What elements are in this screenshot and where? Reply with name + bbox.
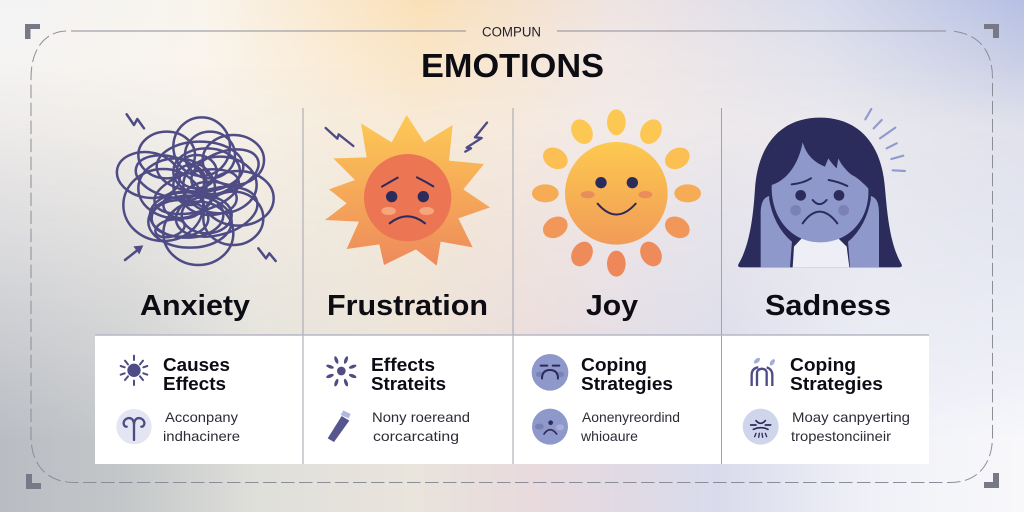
icon: frown badge one <box>532 354 568 391</box>
body text: Moay canpyerting <box>792 409 910 425</box>
body text: Nony roereand <box>372 409 470 425</box>
small overline label: COMPUN <box>482 24 541 40</box>
heading: Sadness: Sadness <box>765 290 891 322</box>
subheading: Strateits <box>371 374 446 394</box>
subheading: Effects <box>371 355 435 375</box>
body text: tropestonciineir <box>791 428 891 444</box>
heading: Joy: Joy <box>586 290 638 322</box>
icon: aries glyph <box>116 409 152 444</box>
icon: frown badge two <box>532 409 568 445</box>
subheading: Coping <box>581 355 647 375</box>
heading: Frustration: Frustration <box>327 290 488 322</box>
icon: joy sun <box>532 109 701 277</box>
icon: pencil <box>328 410 351 442</box>
body text: indhacinere <box>163 428 240 444</box>
icon: sad badge <box>743 409 779 445</box>
panel: details table <box>95 335 929 464</box>
column dividers <box>95 108 929 464</box>
body text: corcarcating <box>373 428 459 444</box>
subheading: Causes <box>163 355 230 375</box>
cell: sadness details <box>743 355 910 445</box>
subheading: Strategies <box>790 374 883 394</box>
icon: small burst <box>326 356 357 387</box>
cell: anxiety details <box>116 355 240 444</box>
subheading: Coping <box>790 355 856 375</box>
body text: Acconpany <box>165 409 238 425</box>
title: EMOTIONS <box>421 48 604 85</box>
subheading: Effects <box>163 374 226 394</box>
cell: frustration details <box>326 355 470 444</box>
icon: arches with drops <box>752 357 776 386</box>
icon: anxiety tangle <box>113 114 276 265</box>
heading: Anxiety: Anxiety <box>140 290 250 322</box>
icon: small sun <box>121 356 147 385</box>
subheading: Strategies <box>581 374 673 394</box>
icon: sad girl <box>738 109 905 267</box>
icon: frustration sun <box>325 115 490 266</box>
cell: joy details <box>532 354 680 445</box>
body text: whioaure <box>580 428 638 444</box>
body text: Aonenyreordind <box>582 409 680 425</box>
